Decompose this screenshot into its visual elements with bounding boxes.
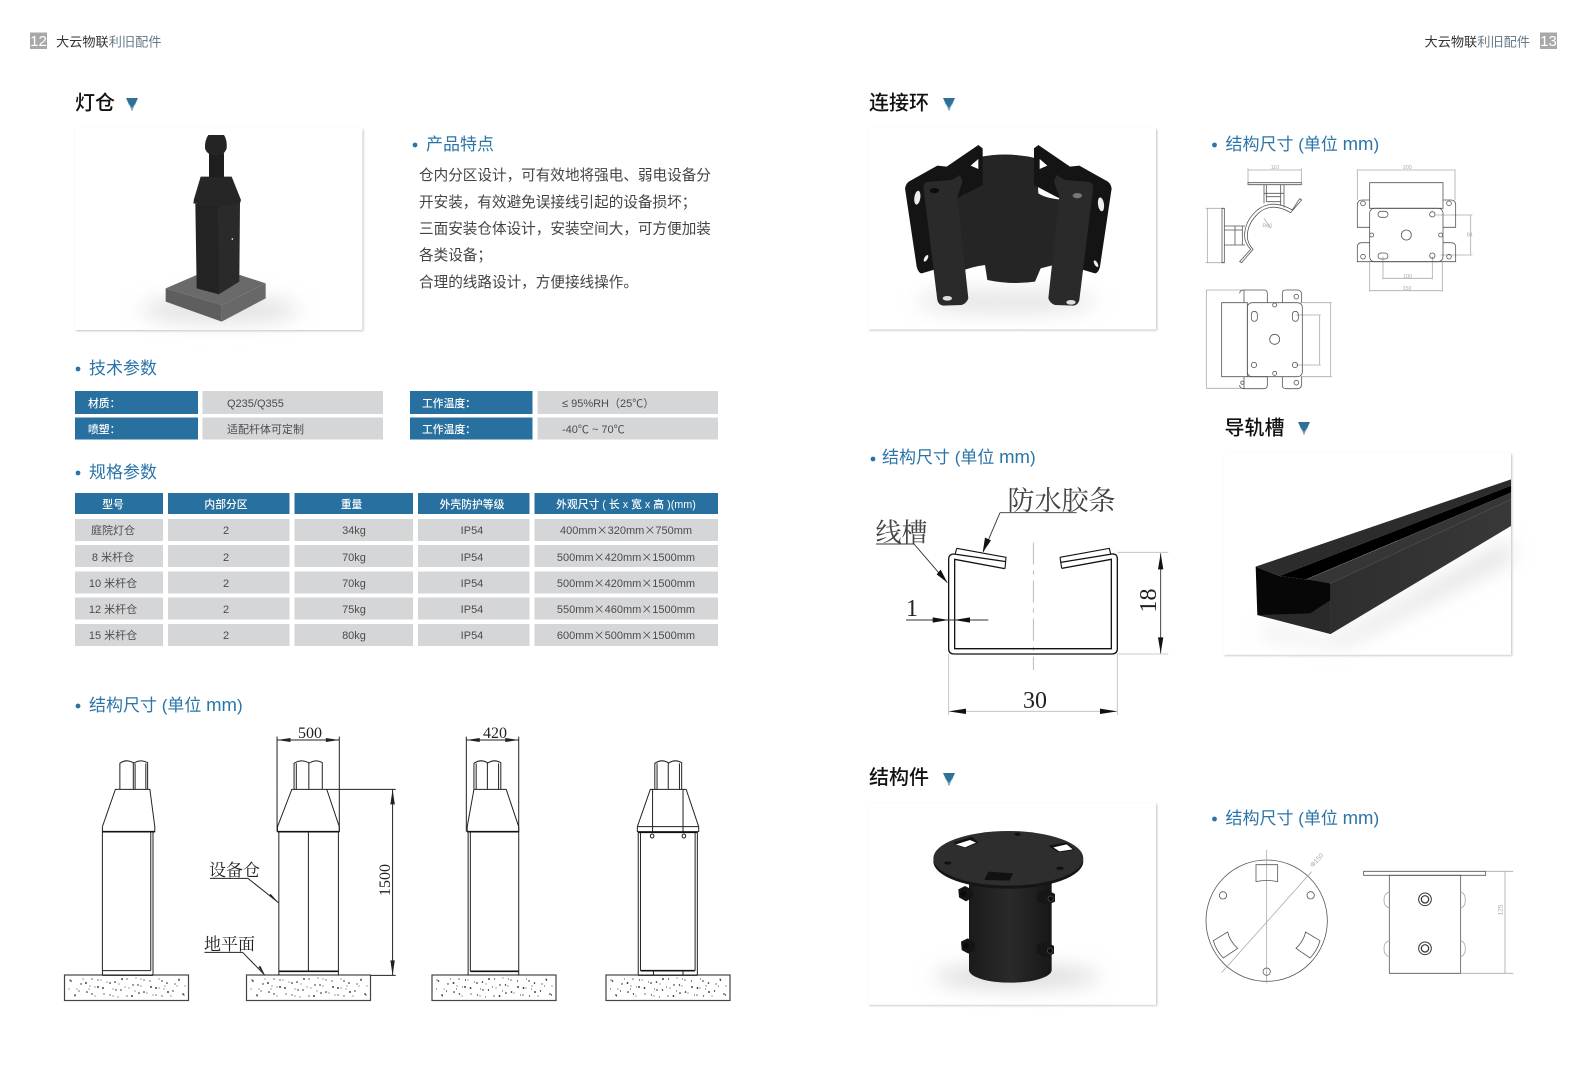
technical parameter table bbox=[75, 391, 718, 440]
heading: specification parameters: 规格参数 bbox=[89, 463, 157, 482]
dimension and callout labels: 420 bbox=[483, 725, 507, 742]
rail labels: 18 bbox=[1136, 588, 1162, 612]
table row: 10 米杆仓: IP54 bbox=[461, 578, 483, 590]
heading: structure dimensions (lamp cabin): 结构尺寸 (单位 mm) bbox=[89, 694, 243, 715]
circular flange view: Φ150 bbox=[1309, 852, 1326, 869]
heading: 连接环 bbox=[869, 92, 955, 114]
left bracket bbox=[905, 145, 983, 306]
dimension values: 84 bbox=[1467, 233, 1473, 239]
feature description text: 合理的线路设计，方便接线操作。 bbox=[419, 274, 638, 291]
technical parameter table: 工作温度： bbox=[422, 396, 476, 410]
rail labels: 防水胶条 bbox=[1008, 486, 1116, 516]
dimension values bbox=[1262, 165, 1473, 292]
left page header: 大云物联利旧配件 bbox=[56, 34, 162, 50]
table row: 庭院灯仓: 34kg bbox=[342, 525, 366, 537]
technical parameter table: ≤ 95%RH（25℃） bbox=[562, 397, 654, 410]
table header row bbox=[75, 493, 718, 514]
table row: 8 米杆仓: 70kg bbox=[342, 552, 366, 564]
table row: 10 米杆仓: 2 bbox=[223, 578, 229, 590]
section: product features bbox=[413, 135, 711, 291]
dimension and callout labels bbox=[204, 725, 507, 954]
table row: 15 米杆仓: 15 米杆仓 bbox=[89, 628, 137, 642]
table row: 12 米杆仓: IP54 bbox=[461, 604, 483, 616]
technical parameter table: 工作温度： bbox=[422, 422, 476, 436]
table row: 12 米杆仓: 12 米杆仓 bbox=[89, 602, 137, 616]
heading: structure dimensions (rail): 结构尺寸 (单位 mm) bbox=[882, 446, 1036, 467]
product render card: guide rail bbox=[1223, 453, 1511, 655]
table row: 8 米杆仓: 8 米杆仓 bbox=[92, 550, 134, 564]
dimension values: 200 bbox=[1403, 165, 1412, 171]
table header row: 重量 bbox=[341, 497, 362, 511]
table header row: 外观尺寸 ( 长 x 宽 x 高 )(mm) bbox=[556, 497, 696, 511]
left page header: 12 bbox=[30, 33, 47, 50]
feature description text: 各类设备； bbox=[419, 247, 492, 264]
product render card: lamp cabin bbox=[75, 128, 362, 330]
table row: 8 米杆仓 bbox=[75, 545, 718, 567]
technical parameter table: 适配杆体可定制 bbox=[227, 422, 304, 436]
heading: 导轨槽: 导轨槽 bbox=[1224, 416, 1284, 440]
table header row: 内部分区 bbox=[204, 497, 248, 511]
technical parameter table: 喷塑： bbox=[88, 422, 120, 436]
dimension and callout labels: 1500 bbox=[377, 864, 394, 896]
technical drawing: lamp cabin elevations bbox=[64, 725, 730, 1000]
dimension and callout labels: 500 bbox=[298, 725, 322, 742]
table row: 12 米杆仓: 2 bbox=[223, 604, 229, 616]
feature description text bbox=[419, 167, 711, 291]
technical drawing: rail cross-section bbox=[876, 486, 1168, 715]
dimension and callout labels: 地平面 bbox=[204, 935, 255, 954]
table row: 12 米杆仓: 550mm×460mm×1500mm bbox=[557, 601, 695, 617]
right page header: 13 bbox=[1540, 33, 1557, 50]
rail labels: 30 bbox=[1023, 688, 1047, 714]
heading: 结构件: 结构件 bbox=[869, 766, 929, 789]
rail labels: 线槽 bbox=[876, 518, 928, 548]
table row: 15 米杆仓: 2 bbox=[223, 630, 229, 642]
table row: 12 米杆仓: 75kg bbox=[342, 604, 366, 616]
table header row: 外壳防护等级 bbox=[440, 497, 505, 511]
table row: 庭院灯仓: 庭院灯仓 bbox=[91, 523, 135, 537]
right page header: 大云物联利旧配件 bbox=[1424, 34, 1530, 50]
table row: 庭院灯仓: IP54 bbox=[461, 525, 483, 537]
table row: 8 米杆仓: 500mm×420mm×1500mm bbox=[557, 549, 695, 565]
product render card: structural part bbox=[868, 803, 1156, 1005]
dimension values: 110 bbox=[1271, 165, 1279, 171]
bottom left plate view bbox=[1206, 290, 1332, 389]
heading: 灯仓: 灯仓 bbox=[75, 92, 115, 114]
feature description text: 仓内分区设计，可有效地将强电、弱电设备分 bbox=[419, 167, 711, 184]
table row: 8 米杆仓: 2 bbox=[223, 552, 229, 564]
bolts bbox=[958, 886, 1055, 957]
table row: 15 米杆仓: IP54 bbox=[461, 630, 483, 642]
side view with bolts: 125 bbox=[1498, 904, 1505, 916]
technical parameter table: Q235/Q355 bbox=[227, 398, 284, 410]
heading: structure dimensions (structural part): 结构尺寸 (单位 mm) bbox=[1226, 807, 1379, 828]
table row: 10 米杆仓 bbox=[75, 572, 718, 594]
technical drawing: connecting ring three views bbox=[1206, 165, 1473, 389]
elevation view 1 bbox=[102, 761, 155, 975]
specification table bbox=[75, 493, 718, 646]
technical parameter table: 材质： bbox=[88, 396, 120, 410]
table row: 15 米杆仓: 80kg bbox=[342, 630, 366, 642]
circular flange view bbox=[1206, 850, 1327, 983]
heading: structure dimensions (connecting ring): 结构尺寸 (单位 mm) bbox=[1226, 133, 1379, 154]
table row: 10 米杆仓: 10 米杆仓 bbox=[89, 576, 137, 590]
feature description text: 三面安装仓体设计，安装空间大，可方便加装 bbox=[419, 220, 711, 238]
right bracket bbox=[1034, 145, 1112, 306]
table row: 12 米杆仓 bbox=[75, 598, 718, 620]
technical drawing: structural part views bbox=[1206, 850, 1513, 983]
dimension values: 100 bbox=[1403, 274, 1412, 280]
table row: 15 米杆仓 bbox=[75, 624, 718, 646]
table row: 10 米杆仓: 70kg bbox=[342, 578, 366, 590]
table row: 庭院灯仓: 400mm×320mm×750mm bbox=[560, 522, 692, 538]
table row: 15 米杆仓: 600mm×500mm×1500mm bbox=[557, 627, 695, 643]
side view with curved clamp bbox=[1206, 168, 1302, 263]
rail labels: 1 bbox=[906, 596, 918, 622]
table row: 8 米杆仓: IP54 bbox=[461, 552, 483, 564]
heading: 连接环: 连接环 bbox=[869, 92, 929, 114]
elevation view 2 with dimensions bbox=[205, 737, 396, 975]
elevation view 4 rear bbox=[637, 761, 699, 975]
table row: 10 米杆仓: 500mm×420mm×1500mm bbox=[557, 575, 695, 591]
side view with bolts bbox=[1364, 871, 1513, 973]
top right plate view bbox=[1357, 169, 1472, 292]
heading: 结构件 bbox=[869, 766, 955, 789]
right page header bbox=[1424, 32, 1557, 50]
rail labels bbox=[876, 486, 1162, 714]
elevation view 3 with width dimension bbox=[466, 737, 519, 975]
concrete bases bbox=[64, 975, 730, 1000]
section: product features: 产品特点 bbox=[426, 135, 494, 154]
table header row: 型号 bbox=[102, 498, 124, 511]
table row: 庭院灯仓 bbox=[75, 519, 718, 541]
channel profile bbox=[876, 513, 1168, 715]
dimension values: R60 bbox=[1262, 223, 1272, 229]
heading: 灯仓 bbox=[75, 92, 138, 114]
dimension and callout labels: 设备仓 bbox=[209, 861, 260, 880]
heading: technical parameters: 技术参数 bbox=[89, 359, 157, 378]
heading: 导轨槽 bbox=[1224, 416, 1310, 440]
feature description text: 开安装，有效避免误接线引起的设备损坏； bbox=[419, 194, 696, 211]
left page header bbox=[30, 32, 162, 50]
product render card: connecting ring bbox=[868, 128, 1156, 329]
dimension values: 150 bbox=[1403, 286, 1411, 292]
table row: 庭院灯仓: 2 bbox=[223, 525, 229, 537]
technical parameter table: -40℃ ~ 70℃ bbox=[562, 424, 625, 436]
